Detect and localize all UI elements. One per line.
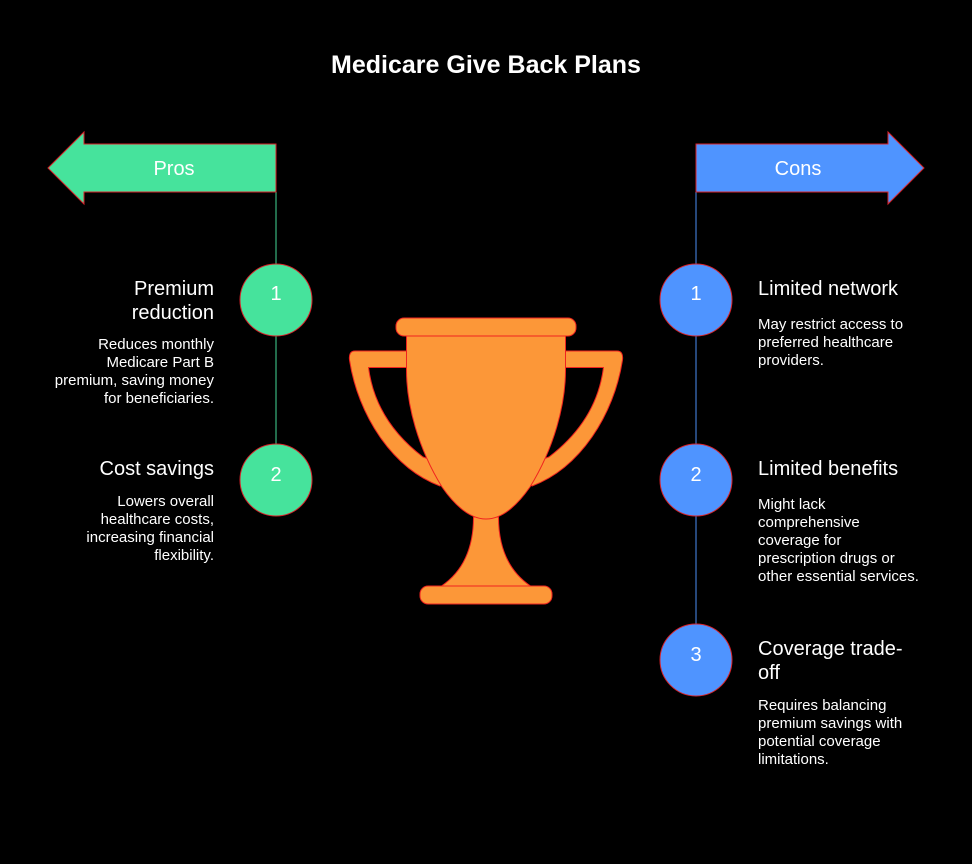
text block: premium reduction: for beneficiaries. [104, 390, 214, 407]
badge: pros 2: 2 [270, 464, 282, 486]
text block: coverage trade-off: Requires balancing [758, 697, 886, 714]
badge: cons 2 [660, 444, 732, 516]
badge: cons 2: 2 [690, 464, 702, 486]
connector: pros timeline [275, 192, 277, 480]
text block: coverage trade-off: off [758, 662, 780, 684]
badge: cons 1 [660, 264, 732, 336]
text block: limited benefits: prescription drugs or [758, 550, 895, 567]
text block: limited benefits: Might lack [758, 496, 826, 513]
arrow: pros banner [48, 132, 276, 204]
text block: limited benefits: comprehensive [758, 514, 860, 531]
text block: limited network [758, 278, 903, 369]
text block: coverage trade-off: limitations. [758, 751, 829, 768]
text block: limited network: May restrict access to [758, 316, 903, 333]
badge: pros 2 [240, 444, 312, 516]
text block: limited network: providers. [758, 352, 824, 369]
text block: cost savings: healthcare costs, [101, 511, 214, 528]
text block: limited benefits [758, 458, 919, 585]
icon: trophy [349, 318, 623, 604]
badge: cons 1: 1 [690, 283, 702, 305]
badge: pros 1: 1 [270, 283, 282, 305]
text block: coverage trade-off: potential coverage [758, 733, 881, 750]
arrow: cons banner: Cons [775, 158, 821, 180]
text block: premium reduction: Reduces monthly [98, 336, 214, 353]
panel: pros [48, 132, 312, 564]
text block: premium reduction [55, 278, 214, 407]
text block: coverage trade-off: premium savings with [758, 715, 902, 732]
arrow: cons banner [696, 132, 924, 204]
text block: limited benefits: Limited benefits [758, 458, 898, 480]
text block: coverage trade-off: Coverage trade- [758, 638, 903, 660]
text block: limited network: preferred healthcare [758, 334, 893, 351]
text block: premium reduction: Premium [134, 278, 214, 300]
text block: cost savings: increasing financial [86, 529, 214, 546]
text block: limited benefits: coverage for [758, 532, 841, 549]
text block: coverage trade-off [758, 638, 903, 768]
connector: cons timeline [695, 192, 697, 660]
text block: cost savings: Lowers overall [117, 493, 214, 510]
badge: cons 3: 3 [690, 644, 702, 666]
text block: premium reduction: reduction [132, 302, 214, 324]
text block: premium reduction: premium, saving money [55, 372, 214, 389]
badge: pros 1 [240, 264, 312, 336]
arrow: pros banner: Pros [153, 158, 195, 180]
text block: limited network: Limited network [758, 278, 899, 300]
text block: cost savings [86, 458, 214, 564]
text block: limited benefits: other essential services. [758, 568, 919, 585]
panel: cons [660, 132, 924, 768]
text block: cost savings: flexibility. [154, 547, 214, 564]
badge: cons 3 [660, 624, 732, 696]
text block: premium reduction: Medicare Part B [106, 354, 214, 371]
text block: cost savings: Cost savings [100, 458, 214, 480]
title: Medicare Give Back Plans [331, 51, 641, 79]
